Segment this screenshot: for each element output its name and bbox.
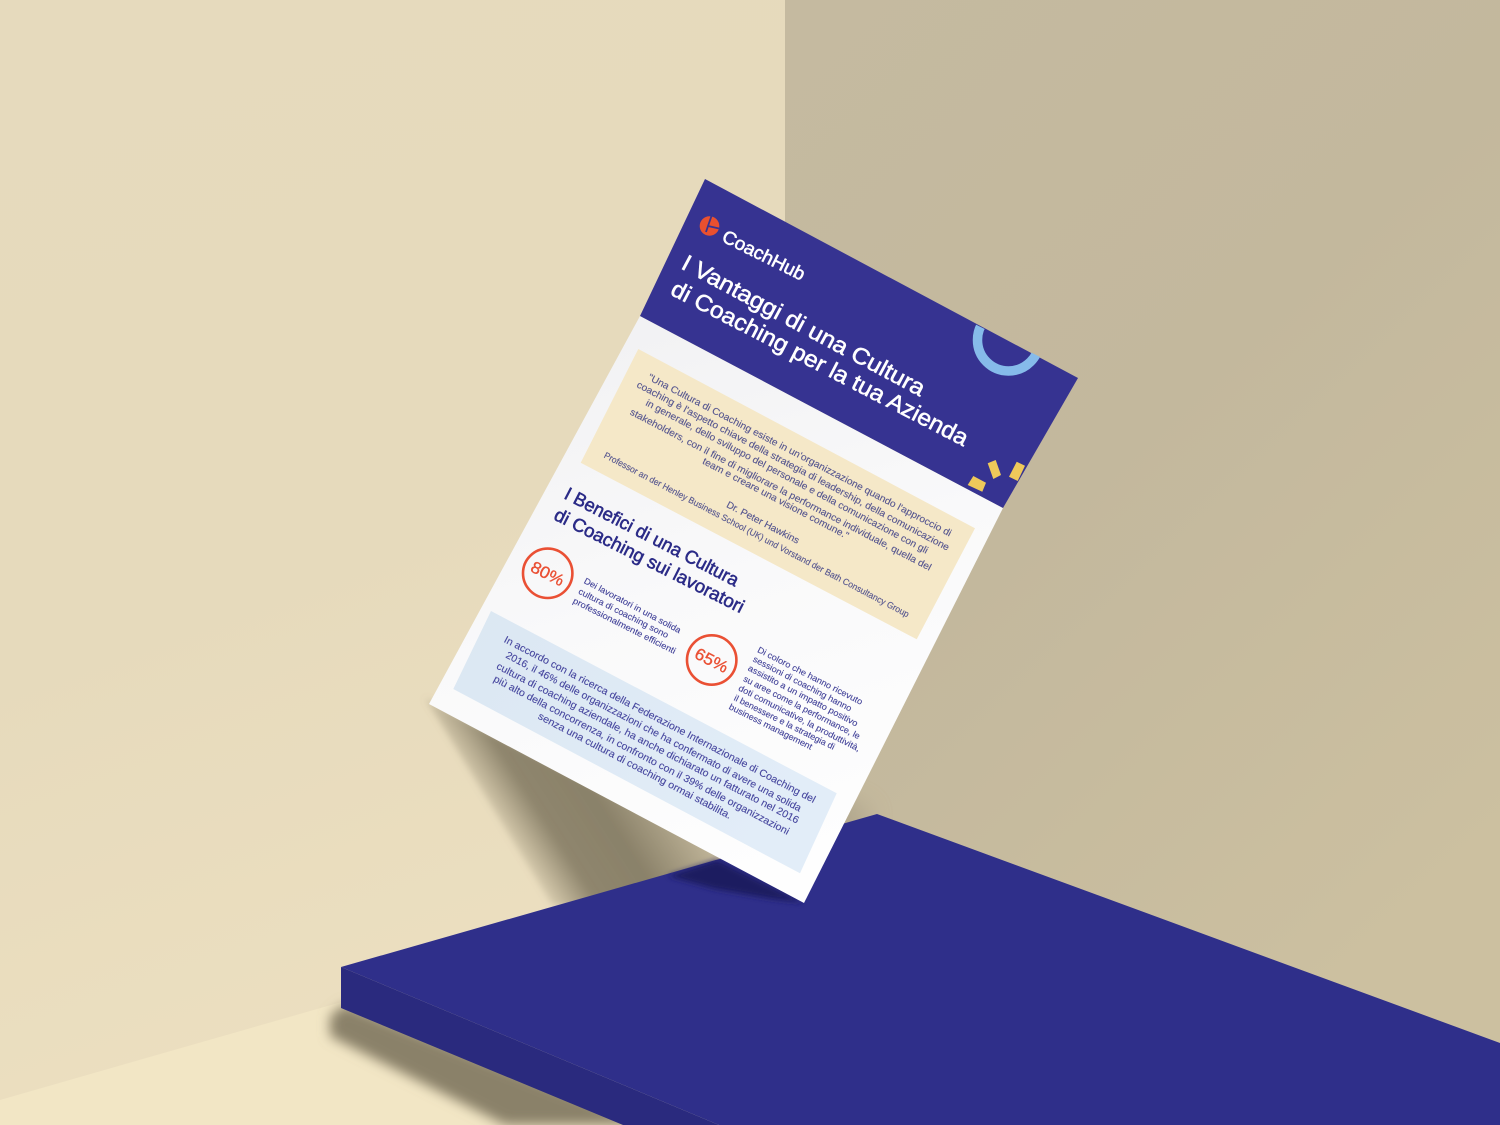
logo: CoachHub xyxy=(700,216,809,284)
stat text 65%: assistito a un impatto positivo xyxy=(746,663,860,728)
quote attribution: Dr. Peter Hawkins xyxy=(724,500,801,547)
stat text 80% xyxy=(571,576,683,656)
circle badge 80% xyxy=(523,549,572,598)
quote attribution: Professor an der Henley Business School (UK) und Vorstand der Bath Consultancy Group xyxy=(602,450,911,619)
blue slab xyxy=(341,814,1500,1125)
research text: senza una cultura di coaching ormai stabilita. xyxy=(536,711,733,822)
background: floor xyxy=(0,1001,800,1125)
background: left wall xyxy=(0,0,786,1125)
panel: research xyxy=(453,611,837,873)
research text: In accordo con la ricerca della Federazione Internazionale di Coaching del xyxy=(502,635,817,806)
research text: 2016, il 46% delle organizzazioni che ha confermato di avere una solida xyxy=(504,650,803,815)
infographic sheet xyxy=(429,179,1078,903)
sheet body xyxy=(429,316,1003,903)
quote text: coaching è l'aspetto chiave della strategia di leadership, della comunicazione xyxy=(635,380,951,553)
stat text 65%: business management xyxy=(727,702,815,752)
heading: benefits: I Benefici di una Cultura xyxy=(561,483,743,591)
panel: quote xyxy=(581,349,975,639)
shadow of the sheet on the slab xyxy=(668,860,804,903)
quote text: "Una Cultura di Coaching esiste in un'organizzazione quando l'approccio di xyxy=(646,372,953,539)
quote text: stakeholders, con il fine di migliorare la performance individuale, quella del xyxy=(628,407,933,573)
slab top face xyxy=(341,814,1500,1125)
circle badge 65% xyxy=(687,635,736,685)
research text: cultura di coaching aziendale, ha anche dichiarato un fatturato nel 2016 xyxy=(494,661,801,827)
quote text: in generale, dello sviluppo del personale e della comunicazione con gli xyxy=(644,398,930,556)
shadow of the sheet on the wall xyxy=(425,698,870,915)
research text: più alto della concorrenza, in confronto con il 39% delle organizzazioni xyxy=(491,674,791,838)
circle badge 80%: 80% xyxy=(528,558,567,590)
stat text 65% xyxy=(727,645,865,754)
quote text: team e creare una visione comune." xyxy=(700,456,851,542)
header band xyxy=(640,179,1078,508)
stat text 65%: sessioni di coaching hanno xyxy=(751,654,854,713)
logo: CoachHub: CoachHub xyxy=(719,225,809,284)
slab front side xyxy=(341,967,719,1125)
decorative yellow dashes xyxy=(968,460,1025,492)
stat text 65%: il benessere e la strategia di xyxy=(732,693,837,752)
stat: 65% xyxy=(687,635,865,754)
stat text 80%: professionalmente efficienti xyxy=(571,596,678,656)
circle badge 65%: 65% xyxy=(692,645,731,677)
stat: 80% xyxy=(523,549,683,656)
stat text 65%: su aree come la performance, le xyxy=(742,674,862,741)
title: di Coaching per la tua Azienda xyxy=(667,275,973,451)
stat text 80%: cultura di coaching sono xyxy=(577,586,670,640)
stat text 65%: Di coloro che hanno ricevuto xyxy=(756,645,865,707)
heading: benefits: di Coaching sui lavoratori xyxy=(551,504,748,617)
stat text 65%: doti comunicative, la produttività, xyxy=(737,683,862,754)
title: I Vantaggi di una Cultura xyxy=(678,249,930,401)
stat text 80%: Dei lavoratori in una solida xyxy=(582,576,683,635)
shadow under blue slab xyxy=(330,1004,650,1125)
background: right wall xyxy=(785,0,1500,1125)
decorative light blue ring xyxy=(978,309,1040,371)
